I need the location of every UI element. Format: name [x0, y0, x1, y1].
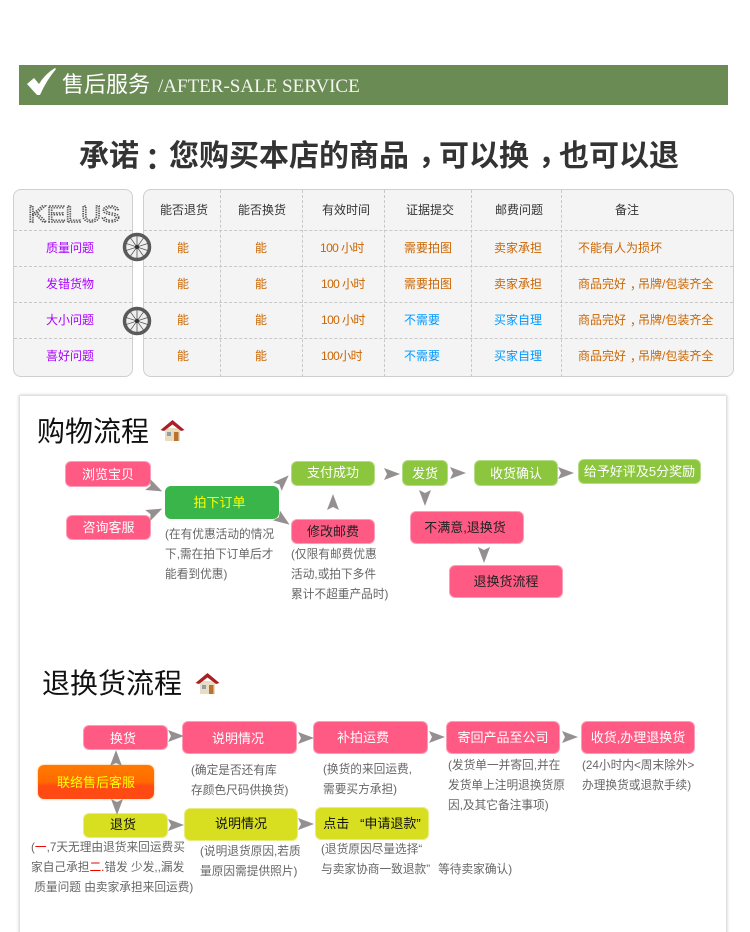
- note: confirm stock: [191, 764, 288, 797]
- flow box: send back: 寄回产品至公司: [457, 730, 548, 745]
- table row 3: [144, 302, 733, 338]
- table row 3: 不需要: [404, 313, 440, 327]
- table header: 能否退货: [160, 203, 208, 217]
- table row 4: 能: [255, 349, 267, 363]
- table row 2: ，: [630, 278, 642, 292]
- note: exchange shipping: (换货的来回运费,: [323, 763, 412, 776]
- banner: after-sale service: [19, 65, 728, 105]
- table row 4: 不需要: [404, 349, 440, 363]
- flow box: send back: [446, 721, 560, 754]
- flow box: unsatisfied: [410, 511, 524, 544]
- row: wrong item: 发错货物: [46, 277, 94, 291]
- flow box: positive review: 给予好评及5分奖励: [584, 464, 695, 479]
- banner subtitle: /AFTER-SALE SERVICE: [158, 76, 360, 97]
- flow box: receive and process: [581, 721, 695, 754]
- flow box: change postage: 修改邮费: [307, 524, 359, 539]
- table row 3: 能: [177, 313, 189, 327]
- note: order discount: [165, 528, 274, 581]
- flow box: explain exchange: 说明情况: [212, 731, 264, 746]
- banner heading: 售后服务: [62, 72, 150, 97]
- icon: house 2: [196, 673, 220, 694]
- note: refund reason: 量原因需提供照片): [200, 865, 297, 878]
- note: exchange shipping: [323, 762, 412, 796]
- flow box: explain exchange: [182, 721, 297, 754]
- flow box: contact service: [38, 765, 154, 799]
- table header: 证据提交: [406, 203, 454, 217]
- note: exchange shipping: 需要买方承担): [323, 783, 397, 796]
- table row 2: 100 小时: [321, 277, 365, 291]
- flow box: exchange: [83, 725, 168, 750]
- flow box: change postage: [291, 519, 375, 544]
- icon: house 1: [160, 420, 184, 441]
- title: promise: ，: [538, 138, 568, 171]
- flow box: payment success: [291, 461, 375, 486]
- icon: wheel top: [122, 232, 152, 262]
- flow box: receive and process: 收货,办理退换货: [591, 730, 685, 745]
- note: refund shipping: (一,7天无理由退货来回运费买: [31, 841, 185, 854]
- title: promise: ：: [145, 143, 175, 176]
- table row 4: ，: [630, 350, 642, 364]
- table row 4: 100小时: [321, 349, 362, 363]
- note: refund reason: [200, 844, 301, 878]
- title: promise: 承诺 您购买本店的商品 可以换 也可以退: [79, 140, 679, 173]
- table row 1: 不能有人为损坏: [578, 241, 662, 255]
- note: confirm stock: 存颜色尺码供换货): [191, 784, 288, 797]
- note: 24 hours: [582, 758, 694, 792]
- table row 3: ，: [630, 314, 642, 328]
- flow box: return process: 退换货流程: [473, 574, 538, 589]
- table row 1: 卖家承担: [494, 241, 542, 255]
- note: postage: [291, 548, 388, 601]
- row: wrong item: [14, 266, 132, 302]
- flow box: unsatisfied: 不满意,退换货: [424, 520, 506, 535]
- panel: issue types: [13, 189, 133, 377]
- note: shipping slip: 发货单上注明退换货原: [448, 779, 565, 792]
- icon: check mark: [27, 68, 56, 95]
- table row 1: 能: [255, 241, 267, 255]
- flow box: ship: 发货: [412, 466, 438, 480]
- row: preference issue: 喜好问题: [46, 349, 94, 363]
- heading: shopping process: 购物流程: [37, 416, 149, 447]
- flow box: ship: [402, 460, 448, 486]
- flow box: explain refund: [184, 808, 298, 841]
- flow box: refund: [83, 813, 168, 838]
- table row 3: 100 小时: [321, 313, 365, 327]
- table row 4: 商品完好 吊牌/包装齐全: [578, 349, 713, 363]
- flow box: place order: 拍下订单: [193, 495, 246, 510]
- flow box: apply refund: 点击 “申请退款”: [323, 816, 421, 831]
- table row 2: 需要拍图: [404, 277, 452, 291]
- icon: wheel bottom: [122, 306, 152, 336]
- flow box: place order: [165, 486, 279, 519]
- flow box: payment success: 支付成功: [307, 465, 359, 480]
- flow box: return process: [449, 565, 563, 598]
- flow box: positive review: [578, 459, 701, 484]
- note: order discount: 能看到优惠): [165, 568, 227, 581]
- table row 3: 能: [255, 313, 267, 327]
- table row 1: 需要拍图: [404, 241, 452, 255]
- table row 4: [144, 338, 733, 374]
- flow box: exchange: 换货: [110, 731, 136, 746]
- flow box: pay shipping: 补拍运费: [337, 730, 389, 745]
- table row 2: [144, 266, 733, 302]
- heading: return process: 退换货流程: [42, 668, 182, 699]
- note: refund selection: (退货原因尽量选择“: [321, 843, 422, 856]
- flow box: confirm receipt: 收货确认: [490, 466, 542, 480]
- row: quality issue: [14, 230, 132, 266]
- table row 2: 能: [255, 277, 267, 291]
- table header: 有效时间: [322, 203, 370, 217]
- note: refund reason: (说明退货原因,若质: [200, 845, 301, 858]
- note: order discount: 下,需在拍下订单后才: [165, 548, 273, 561]
- row: size issue: 大小问题: [46, 313, 94, 327]
- note: 24 hours: 办理换货或退款手续): [582, 779, 691, 792]
- note: refund shipping: 家自己承担二.错发 少发,,漏发: [31, 861, 184, 874]
- flow box: refund: 退货: [110, 817, 136, 832]
- note: postage: 活动,或拍下多件: [291, 568, 376, 581]
- table row 4: 能: [177, 349, 189, 363]
- note: postage: 累计不超重产品时): [291, 588, 388, 601]
- table row 1: 100 小时: [320, 241, 364, 255]
- flow box: consult: 咨询客服: [82, 520, 134, 535]
- note: postage: (仅限有邮费优惠: [291, 548, 377, 561]
- table row 3: 买家自理: [494, 313, 542, 327]
- table header: 能否换货: [238, 203, 286, 217]
- row: size issue: [14, 302, 132, 338]
- table row 1: [144, 230, 733, 266]
- table row 3: 商品完好 吊牌/包装齐全: [578, 313, 713, 327]
- flow box: contact service: 联络售后客服: [57, 774, 135, 790]
- table header: 邮费问题: [495, 203, 543, 217]
- flow box: browse: 浏览宝贝: [82, 466, 134, 482]
- table row 2: 能: [177, 277, 189, 291]
- flow box: confirm receipt: [474, 460, 558, 486]
- note: order discount: (在有优惠活动的情况: [165, 528, 274, 541]
- table header: 备注: [615, 203, 639, 217]
- note: refund selection: [321, 842, 512, 876]
- table row 2: 商品完好 吊牌/包装齐全: [578, 277, 713, 291]
- note: 24 hours: (24小时内<周末除外>: [582, 759, 694, 772]
- flow box: pay shipping: [313, 721, 428, 754]
- flow box: explain refund: 说明情况: [215, 816, 267, 831]
- note: confirm stock: (确定是否还有库: [191, 764, 277, 777]
- flow box: browse: [65, 461, 151, 487]
- panel: policy table: [143, 189, 734, 377]
- panel: process card: [20, 396, 726, 932]
- flow box: apply refund: [315, 807, 429, 840]
- note: refund shipping: [31, 840, 193, 894]
- note: refund selection: 与卖家协商一致退款” 等待卖家确认): [321, 863, 512, 876]
- note: shipping slip: 因,及其它备注事项): [448, 799, 549, 812]
- table row 2: 卖家承担: [494, 277, 542, 291]
- note: refund shipping: 质量问题 由卖家承担来回运费): [34, 881, 193, 894]
- table header: [160, 203, 639, 217]
- row: preference issue: [14, 338, 132, 374]
- title: promise: ，: [418, 138, 448, 171]
- note: shipping slip: [448, 758, 565, 812]
- flow box: consult: [66, 515, 151, 540]
- row: quality issue: 质量问题: [46, 241, 94, 255]
- table row 4: 买家自理: [494, 349, 542, 363]
- table row 1: 能: [177, 241, 189, 255]
- note: shipping slip: (发货单一并寄回,并在: [448, 759, 560, 772]
